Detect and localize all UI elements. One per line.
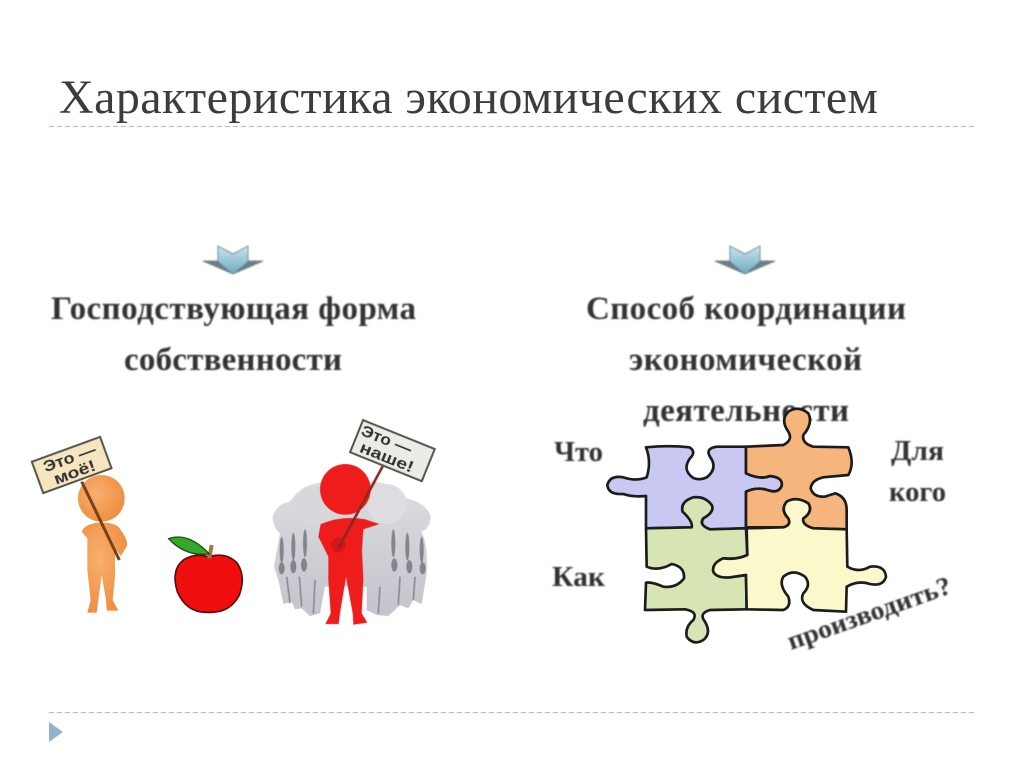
puzzle piece: cream — [713, 499, 886, 612]
person: orange figure — [78, 475, 127, 613]
illustration: crowd with red leader — [273, 420, 435, 625]
heading: left column: Господствующая форма — [51, 291, 416, 327]
heading: right column — [586, 291, 906, 429]
sign: Это наше: наше! — [357, 439, 416, 476]
label: производить: производить? — [783, 571, 955, 656]
label: Для кого: кого — [889, 476, 946, 508]
heading: right column: экономической — [629, 342, 862, 378]
sign: Это мое: моё! — [52, 457, 98, 488]
heading: left column: собственности — [124, 342, 342, 378]
puzzle piece: purple — [607, 446, 782, 529]
sign: Это наше: Это — — [358, 423, 415, 459]
divider: top — [49, 126, 975, 128]
sign: Это мое: Это — — [41, 441, 99, 476]
illustration: puzzle — [607, 409, 886, 642]
puzzle piece: orange — [746, 409, 852, 529]
person: red leader — [318, 464, 379, 625]
heading: right column: Способ координации — [586, 291, 906, 327]
illustration: single owner with sign — [32, 437, 127, 613]
sign: Это мое — [32, 437, 119, 560]
label: Для кого: Для — [891, 435, 944, 467]
icon: right down arrow — [715, 246, 775, 274]
label: Что: Что — [554, 436, 603, 468]
icon: left down arrow — [203, 246, 263, 274]
illustration: apple — [169, 537, 242, 612]
sign: Это наше — [350, 420, 435, 481]
divider: bottom — [49, 712, 975, 714]
title: Характеристика экономических систем — [59, 71, 878, 124]
label: Как: Как — [552, 561, 605, 593]
icon: bottom triangle bullet — [49, 722, 63, 742]
label: Для кого — [889, 435, 946, 508]
heading: right column: деятельности — [643, 393, 849, 429]
heading: left column — [51, 291, 416, 378]
puzzle piece: green — [645, 497, 747, 642]
crowd: grey figures — [273, 482, 431, 616]
